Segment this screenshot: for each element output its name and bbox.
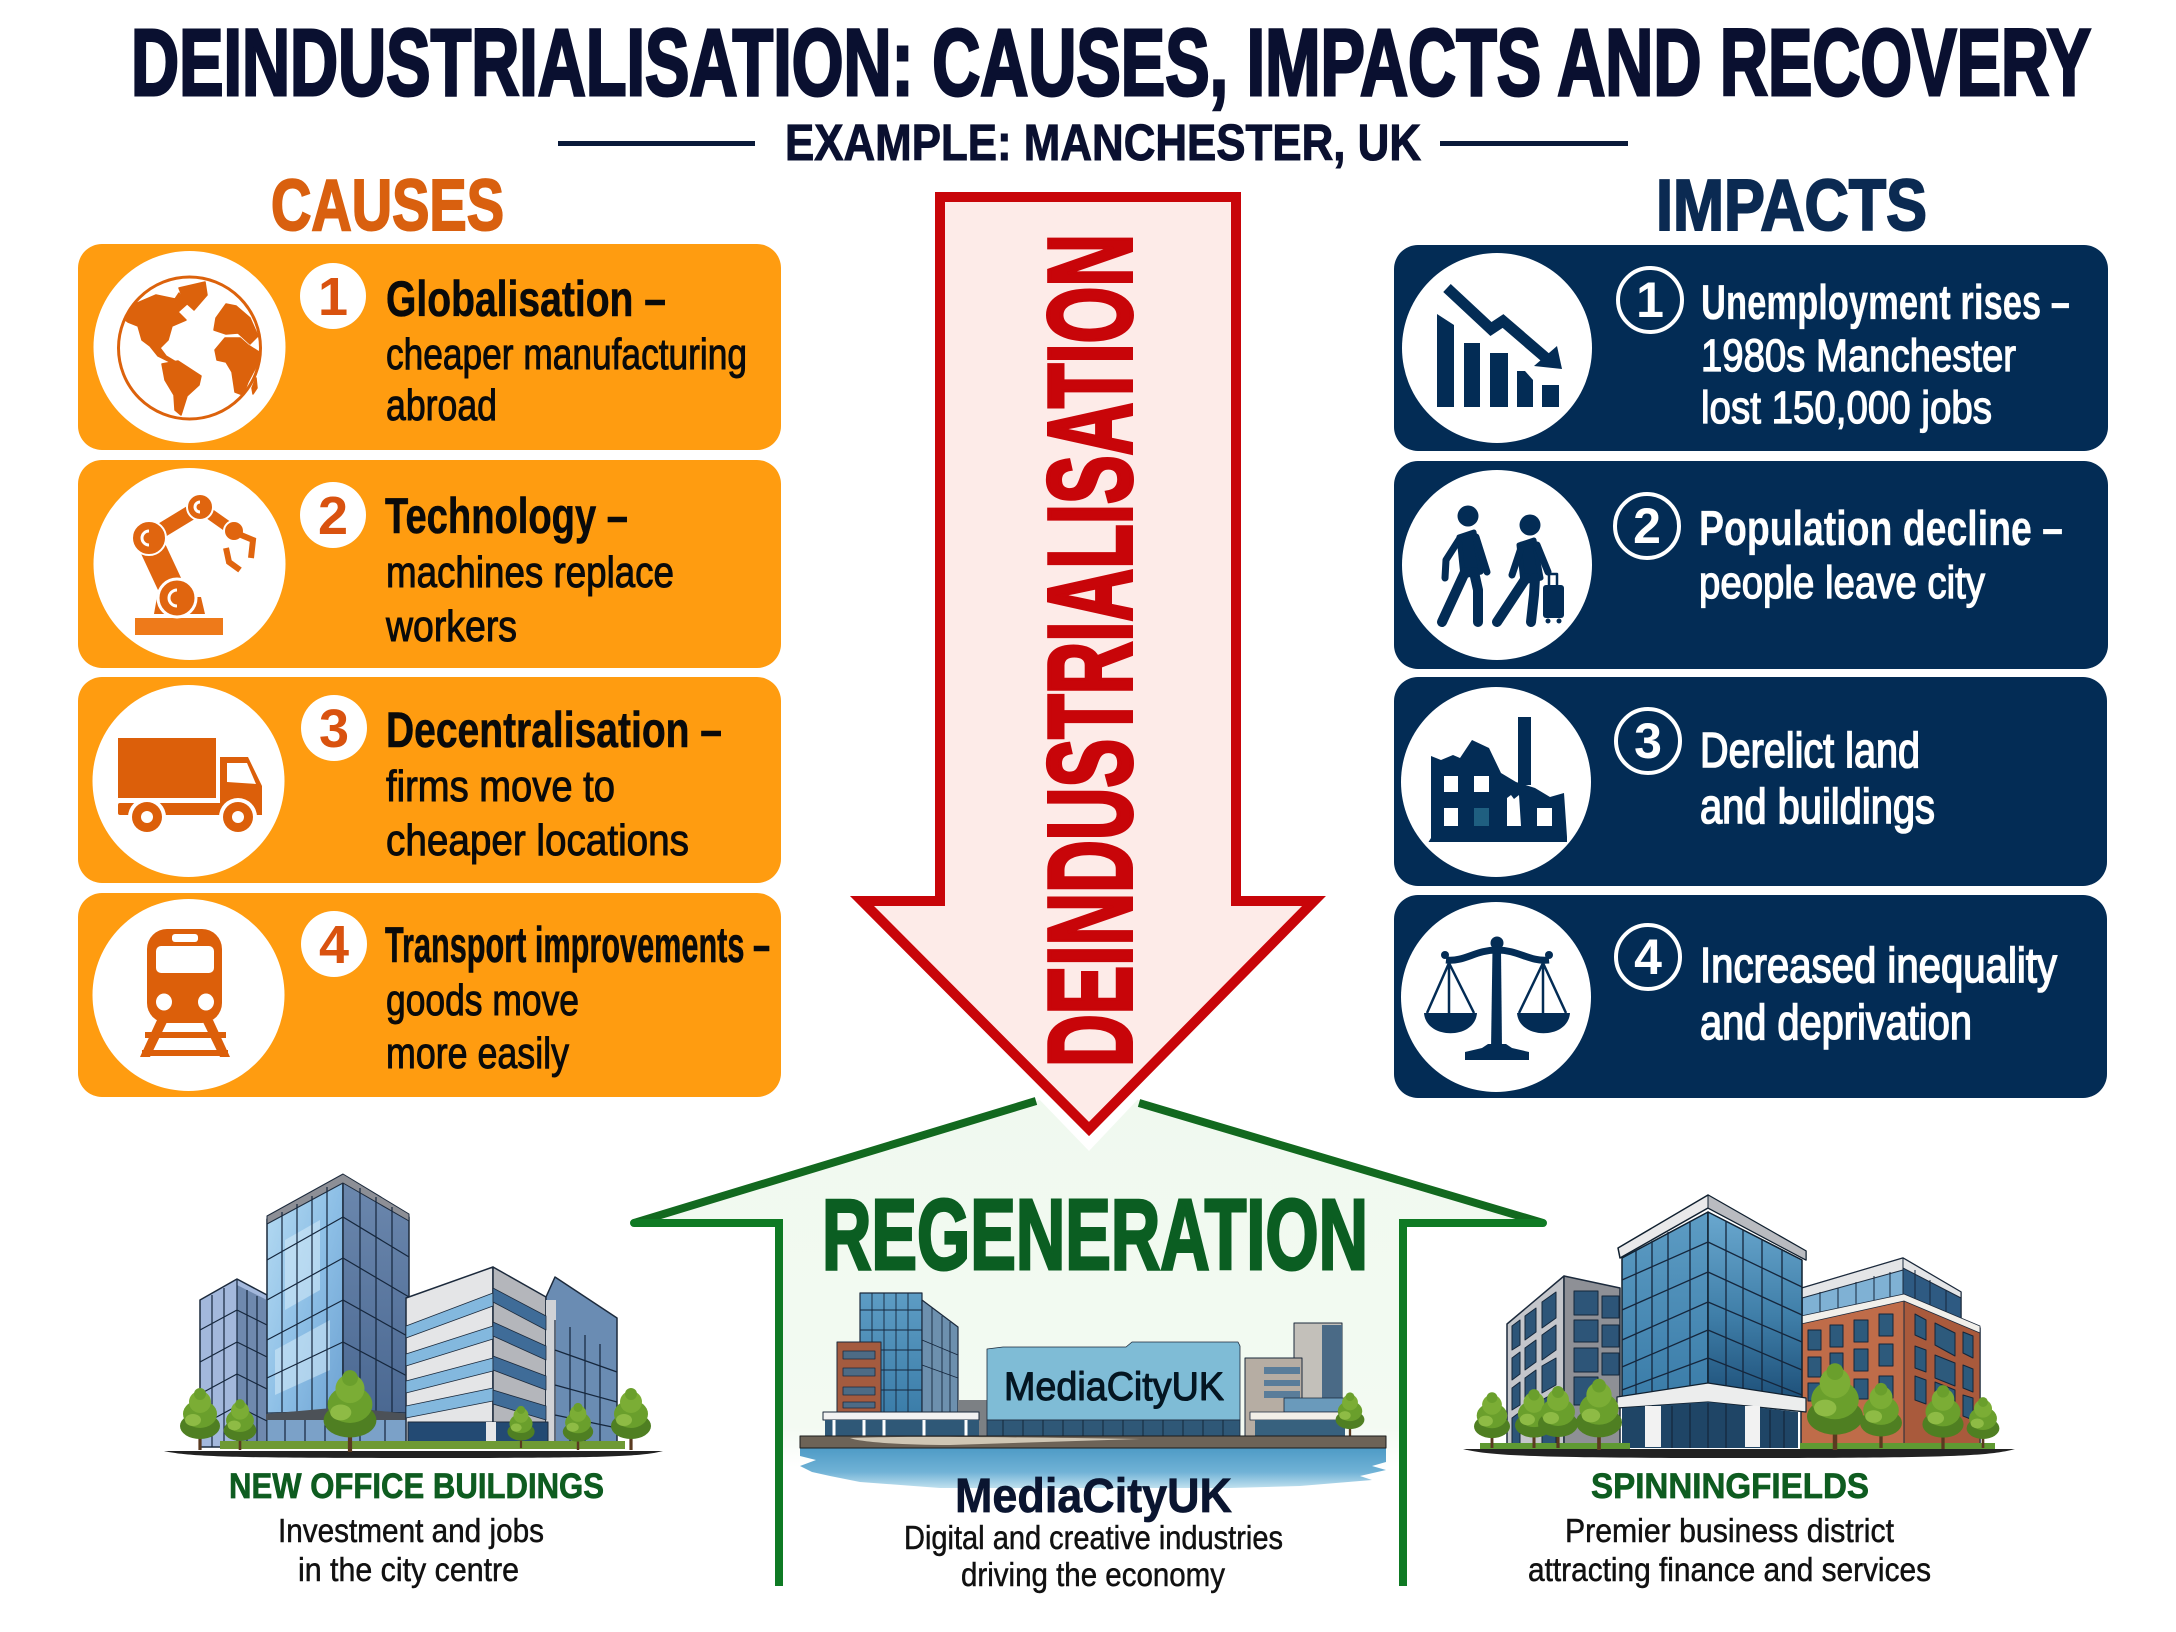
card: derelict: Derelict land xyxy=(1700,724,1920,778)
icon: people leaving xyxy=(1442,506,1564,624)
heading: impacts: IMPACTS xyxy=(1656,166,1927,246)
central glass tower xyxy=(1622,1212,1708,1400)
caption: spinningfields: attracting finance and services xyxy=(1528,1551,1931,1588)
card: globalisation: 1 xyxy=(318,267,348,327)
card: decentralisation xyxy=(78,677,781,883)
card: technology: 2 xyxy=(318,486,348,546)
card: transport xyxy=(78,893,781,1097)
small left tower xyxy=(200,1279,267,1447)
sign building xyxy=(987,1342,1240,1420)
right brick building xyxy=(1802,1258,1961,1325)
card: transport: more easily xyxy=(386,1029,569,1078)
regeneration arrow xyxy=(634,1085,1543,1632)
card: transport: 4 xyxy=(319,915,349,975)
card: derelict xyxy=(1394,677,2107,886)
card: globalisation xyxy=(78,244,781,450)
caption: new office buildings: NEW OFFICE BUILDINGS xyxy=(229,1467,604,1506)
card: decentralisation: Decentralisation – xyxy=(386,702,722,758)
caption: mediacityuk xyxy=(904,1470,1283,1593)
heading: causes: CAUSES xyxy=(271,166,504,246)
icon: falling chart xyxy=(1437,288,1562,407)
heading: regeneration: REGENERATION xyxy=(822,1179,1368,1291)
icon: scales xyxy=(1424,936,1570,1060)
subtitle with rules: EXAMPLE: MANCHESTER, UK xyxy=(785,114,1421,171)
illustration: new office buildings xyxy=(164,1174,663,1458)
icon: derelict factory xyxy=(1428,717,1567,842)
caption: mediacityuk: MediaCityUK xyxy=(955,1470,1232,1523)
card: unemployment xyxy=(1394,245,2108,451)
card: unemployment: 1 xyxy=(1636,272,1664,328)
panel: impacts xyxy=(1394,245,2108,1098)
card: technology: machines replace xyxy=(386,548,674,597)
card: decentralisation: 3 xyxy=(319,699,349,759)
right building front xyxy=(406,1267,493,1445)
card: derelict: and buildings xyxy=(1700,780,1935,834)
hedge and trees xyxy=(1480,1443,1630,1449)
card: inequality: and deprivation xyxy=(1700,996,1972,1050)
card: technology: Technology – xyxy=(385,488,628,544)
card: population: people leave city xyxy=(1699,557,1985,608)
hedge xyxy=(220,1441,625,1449)
caption: spinningfields xyxy=(1528,1467,1931,1588)
main tower xyxy=(267,1177,343,1445)
caption: new office buildings xyxy=(229,1467,604,1588)
card: unemployment: 1980s Manchester xyxy=(1701,330,2016,381)
caption: spinningfields: SPINNINGFIELDS xyxy=(1591,1467,1869,1506)
card: decentralisation: cheaper locations xyxy=(386,816,689,865)
card: globalisation: cheaper manufacturing xyxy=(386,330,747,379)
icon: train xyxy=(140,929,230,1057)
podium xyxy=(823,1412,979,1420)
subtitle with rules xyxy=(558,114,1628,171)
card: inequality: 4 xyxy=(1634,929,1662,985)
card: transport: goods move xyxy=(386,976,579,1025)
sign text: MediaCityUK xyxy=(1004,1365,1224,1409)
illustration: mediacityuk xyxy=(800,1293,1386,1488)
right blocks xyxy=(1294,1323,1342,1403)
card: transport: Transport improvements – xyxy=(385,917,770,973)
caption: new office buildings: in the city centre xyxy=(298,1551,519,1588)
card: decentralisation: firms move to xyxy=(386,762,615,811)
tower xyxy=(860,1293,922,1418)
quay xyxy=(800,1436,1386,1448)
water xyxy=(800,1448,1386,1488)
panel: causes xyxy=(78,244,781,1097)
card: technology xyxy=(78,460,781,668)
card: population: Population decline – xyxy=(1699,502,2063,556)
caption: new office buildings: Investment and jobs xyxy=(278,1512,544,1549)
deindustrialisation arrow xyxy=(862,197,1314,1129)
card: technology: workers xyxy=(385,602,517,651)
icon: globe xyxy=(118,277,260,419)
card: inequality: Increased inequality xyxy=(1700,939,2057,993)
card: globalisation: abroad xyxy=(386,381,497,430)
card: globalisation: Globalisation – xyxy=(386,271,666,327)
icon: truck xyxy=(118,738,262,836)
card: population: 2 xyxy=(1633,498,1661,554)
card: inequality xyxy=(1394,895,2107,1098)
caption: spinningfields: Premier business district xyxy=(1565,1512,1894,1549)
left grey building xyxy=(1507,1276,1564,1445)
halo under deindustrialisation arrow xyxy=(1036,1096,1141,1151)
illustration: spinningfields xyxy=(1463,1195,2015,1458)
canopy xyxy=(1617,1383,1806,1412)
caption: mediacityuk: Digital and creative industries xyxy=(904,1519,1283,1556)
caption: mediacityuk: driving the economy xyxy=(961,1556,1225,1593)
brick block xyxy=(837,1342,881,1412)
card: population xyxy=(1394,461,2108,669)
icon: robot arm xyxy=(132,494,253,635)
card: derelict: 3 xyxy=(1634,713,1662,769)
card: unemployment: lost 150,000 jobs xyxy=(1701,382,1992,433)
